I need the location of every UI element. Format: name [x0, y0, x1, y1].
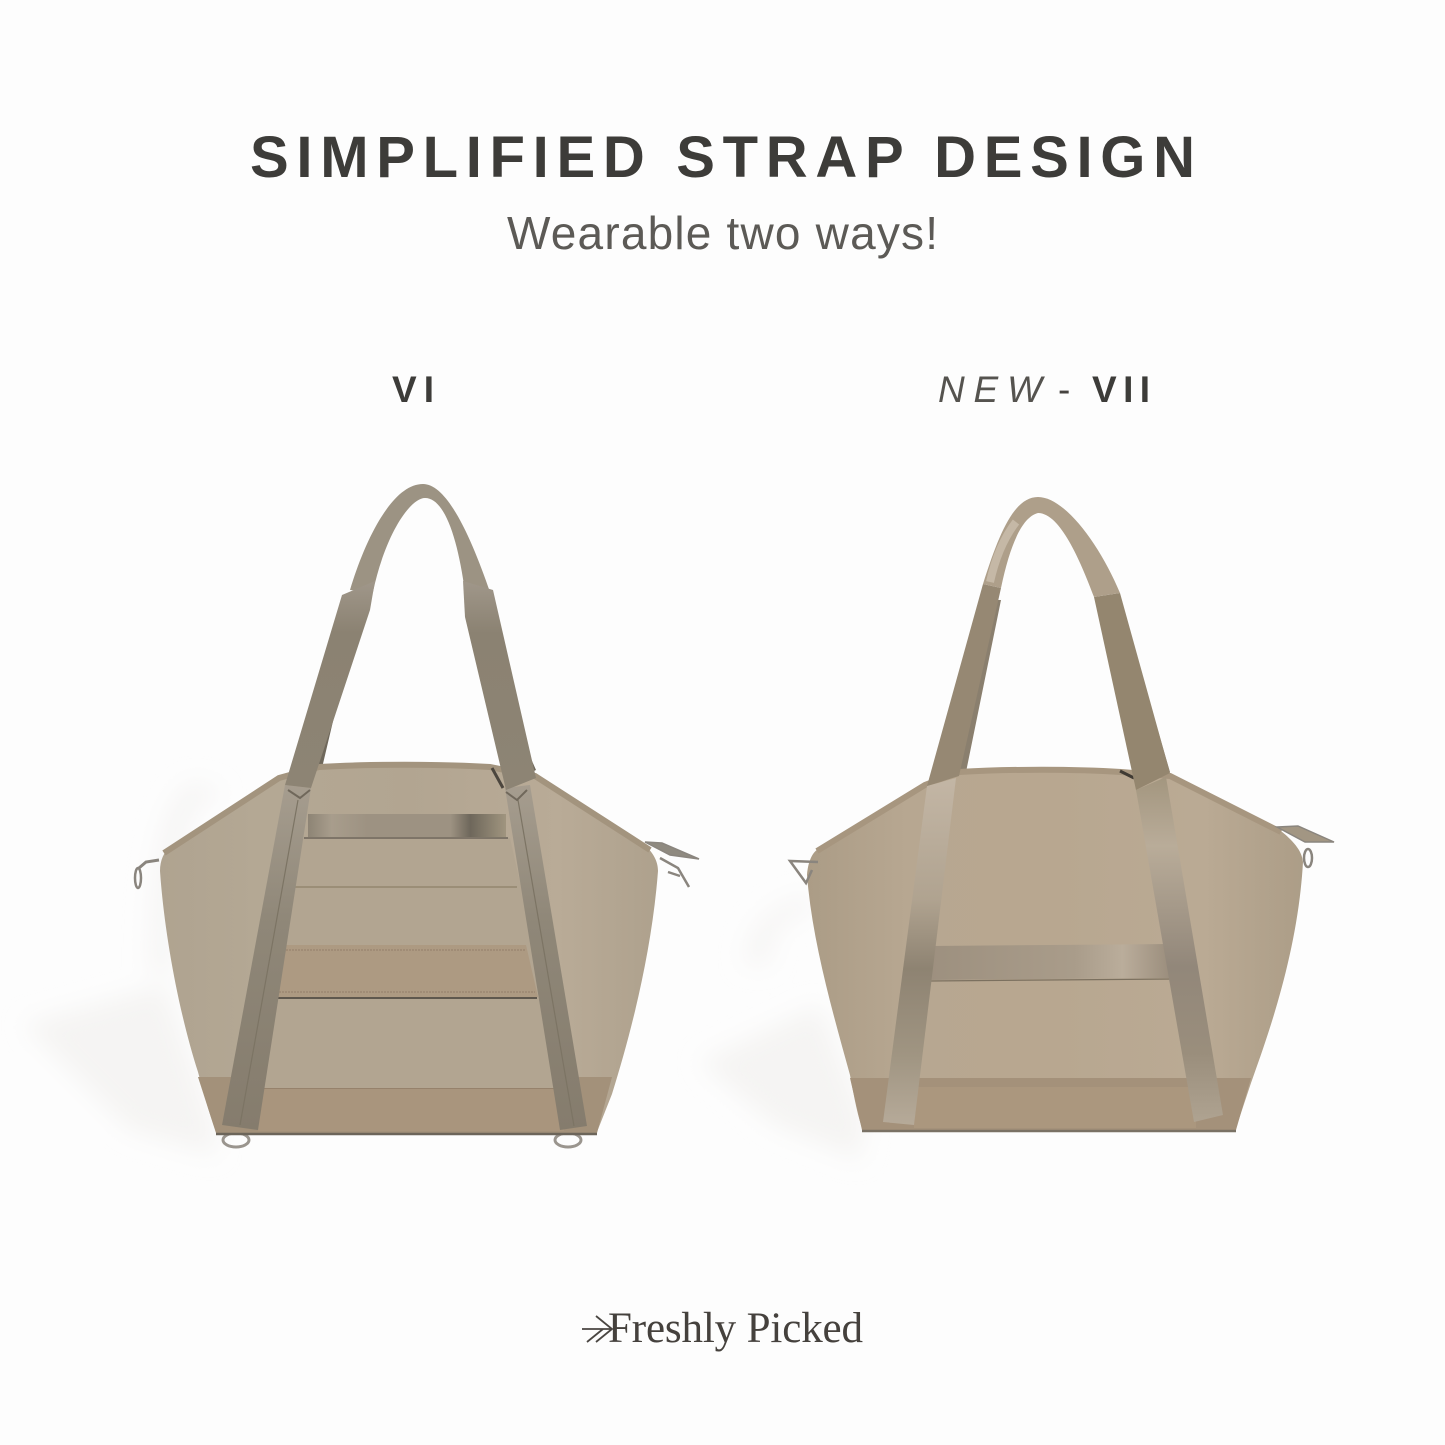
- panel: VI bag: [24, 484, 699, 1155]
- zipper opening: [492, 768, 503, 788]
- webbing strip: [308, 814, 506, 837]
- handle: [983, 497, 1120, 597]
- base panel: [198, 1077, 612, 1133]
- side zipper hardware: [135, 842, 699, 888]
- bag shadow: [24, 782, 225, 1155]
- label: VI: VI: [392, 369, 434, 410]
- braided handle: [350, 484, 490, 592]
- handle highlight: [990, 522, 1016, 582]
- zipper opening: [1120, 771, 1134, 778]
- bag body: [807, 769, 1303, 1128]
- subtitle: Wearable two ways!: [507, 207, 938, 259]
- side zipper hardware: [790, 826, 1334, 883]
- horizontal strap: [929, 944, 1171, 980]
- bag body: [160, 764, 658, 1132]
- label: NEW - VII: VII: [1092, 369, 1150, 410]
- bag shadow: [700, 895, 865, 1160]
- label: NEW - VII: NEW: [938, 369, 1045, 410]
- tan pocket: [272, 945, 538, 997]
- panel: VII bag: [700, 497, 1334, 1160]
- stitch marks: [288, 790, 527, 800]
- strap stitching: [240, 800, 574, 1126]
- base panel: [850, 1078, 1251, 1130]
- zipper rim: [164, 765, 650, 853]
- front pocket panel: [258, 838, 566, 1088]
- upper straps: [927, 584, 1001, 786]
- pocket seam: [290, 886, 517, 888]
- zipper rim: [817, 770, 1281, 851]
- label: NEW - VII: -: [1058, 369, 1070, 410]
- icon: arrow: [582, 1316, 612, 1342]
- front straps: [222, 785, 311, 1130]
- back strap slivers: [316, 700, 536, 774]
- wordmark: Freshly Picked: [608, 1305, 863, 1352]
- front straps: [883, 778, 956, 1125]
- back strap slivers: [958, 600, 1170, 776]
- upper straps: [285, 581, 375, 788]
- bottom D rings: [223, 1133, 581, 1147]
- logo: Freshly Picked: [582, 1305, 863, 1352]
- title: SIMPLIFIED STRAP DESIGN: [250, 125, 1195, 190]
- label: NEW - VII: [938, 369, 1150, 410]
